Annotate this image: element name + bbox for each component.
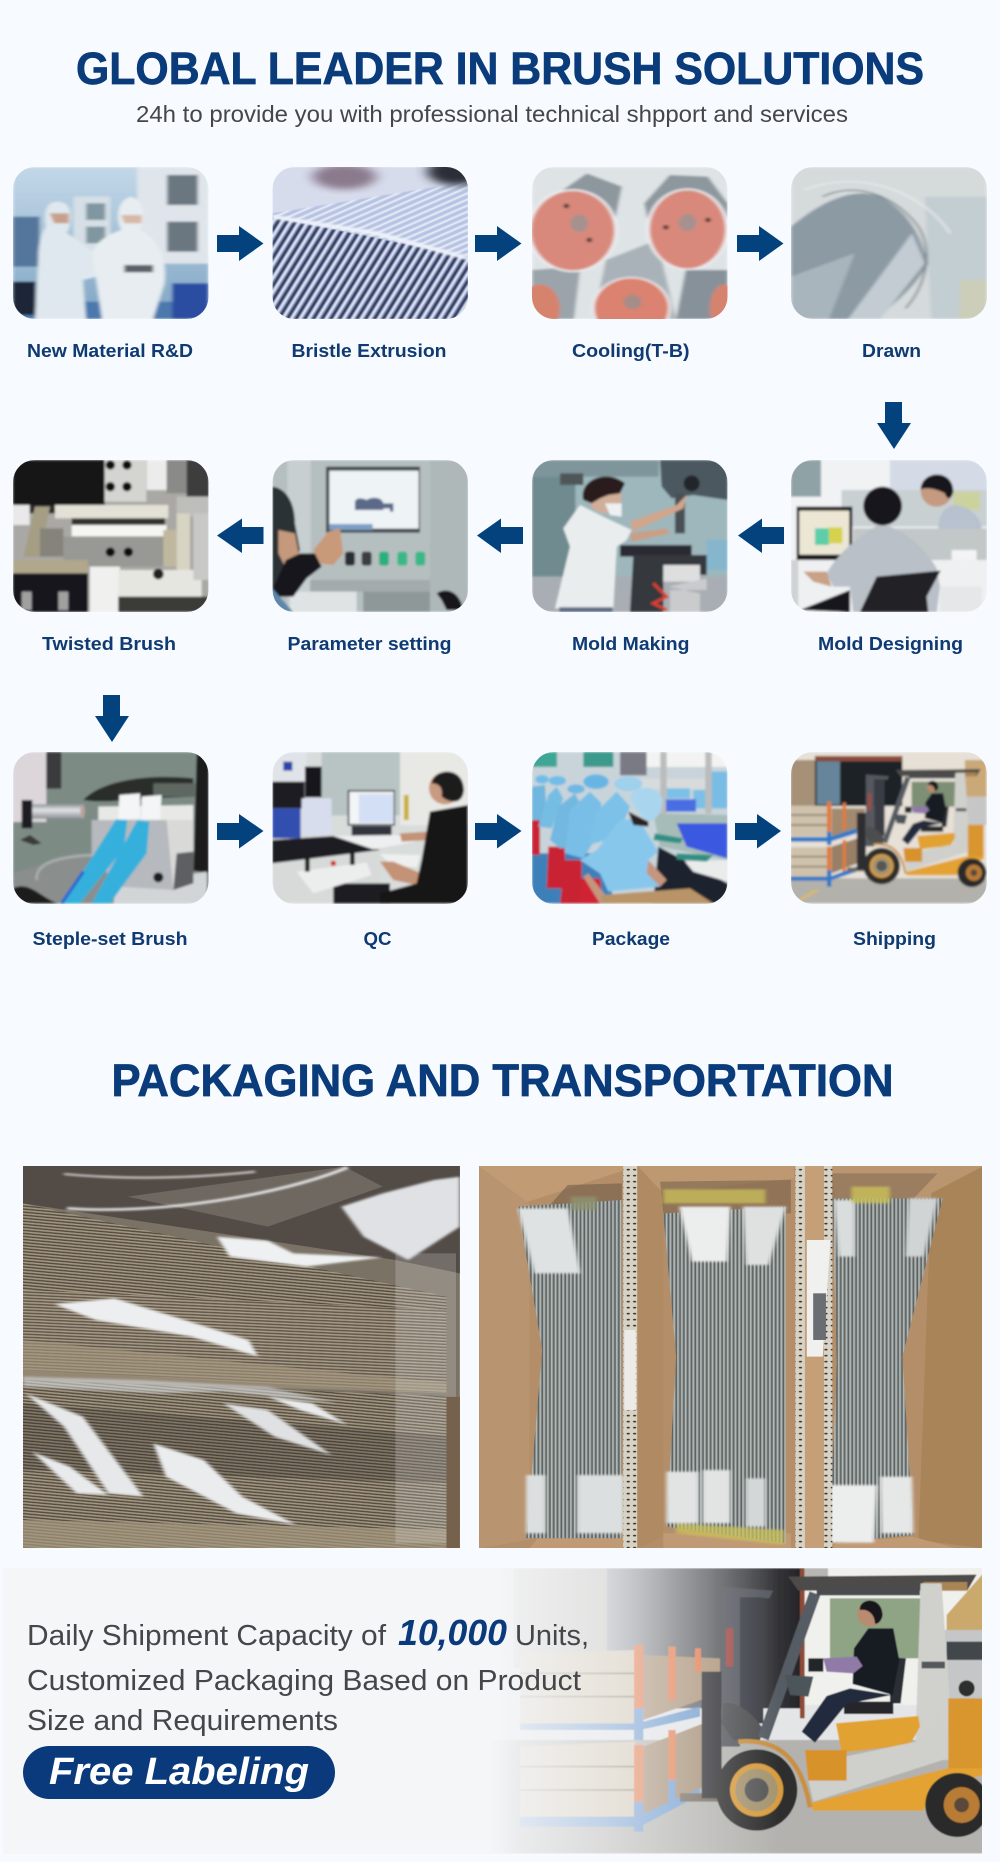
capacity text: Customized Packaging Based on Product: [27, 1665, 581, 1697]
photo: staple-set machine: [13, 752, 210, 903]
step: Parameter setting: [272, 460, 468, 654]
label: QC: [364, 929, 392, 949]
label: Parameter setting: [288, 634, 452, 654]
capacity text: Size and Requirements: [27, 1705, 338, 1737]
step: Bristle Extrusion: [272, 167, 468, 357]
banner background: [3, 1568, 982, 1854]
step: Steple-set Brush: [13, 752, 210, 949]
capacity text: 10,000: [398, 1612, 507, 1653]
label: New Material R&D: [27, 341, 193, 361]
arrow left 1: [738, 518, 784, 553]
arrow down 2: [95, 695, 129, 742]
photo: mold machining: [532, 460, 728, 612]
step: Cooling(T-B): [532, 167, 728, 361]
photo: quality control station: [272, 752, 468, 903]
photo: forklift and stacked pallets: [511, 1568, 982, 1854]
photo: twisting machine: [13, 460, 209, 612]
pill: free labeling: Free Labeling: [49, 1751, 309, 1793]
capacity text: Units,: [515, 1620, 589, 1652]
photo: designers at computer: [791, 460, 987, 612]
step: Mold Making: [532, 460, 728, 654]
photo: drawn filament: [791, 167, 987, 319]
label: Bristle Extrusion: [292, 341, 446, 361]
label: Package: [592, 929, 670, 949]
capacity text: Daily Shipment Capacity of: [27, 1620, 387, 1652]
photo: packaging workers: [532, 752, 728, 903]
step: New Material R&D: [13, 167, 209, 361]
arrow right 4: [217, 814, 264, 848]
arrow right 1: [217, 226, 264, 261]
pill: free labeling: [23, 1746, 335, 1799]
photo: bristle filaments: [272, 167, 468, 319]
arrow down 1: [877, 402, 911, 449]
label: Steple-set Brush: [32, 929, 188, 949]
capacity text: [27, 1612, 589, 1737]
label: Drawn: [862, 341, 921, 361]
step: Twisted Brush: [13, 460, 209, 654]
arrow left 3: [217, 518, 264, 553]
title: global leader: GLOBAL LEADER IN BRUSH SOLUTIONS: [76, 43, 924, 94]
arrow left 2: [477, 518, 523, 553]
step: Mold Designing: [791, 460, 987, 654]
heading: packaging and transportation: PACKAGING AND TRANSPORTATION: [112, 1055, 894, 1106]
arrow right 3: [737, 226, 784, 261]
photo: cooling drums: [532, 167, 728, 319]
label: Mold Making: [572, 634, 690, 654]
label: Cooling(T-B): [572, 341, 690, 361]
label: Mold Designing: [818, 634, 963, 654]
arrow right 6: [735, 814, 781, 848]
subtitle: 24h to provide you with professional technical shpport and services: [136, 101, 848, 127]
label: Twisted Brush: [42, 634, 176, 654]
label: Shipping: [853, 929, 936, 949]
step: Drawn: [791, 167, 987, 361]
photo: forklift loading container: [791, 752, 987, 903]
photo: bagged brushes in plastic: [23, 1166, 460, 1548]
photo: boxed brushes in cartons: [479, 1166, 982, 1548]
arrow right 5: [475, 814, 522, 848]
arrow right 2: [475, 226, 522, 261]
step: Package: [532, 752, 728, 949]
banner: shipment capacity: [3, 1568, 989, 1854]
step: QC: [272, 752, 468, 949]
photo: control panel: [272, 460, 468, 612]
photo: clean room researchers: [13, 167, 209, 319]
step: Shipping: [791, 752, 987, 949]
